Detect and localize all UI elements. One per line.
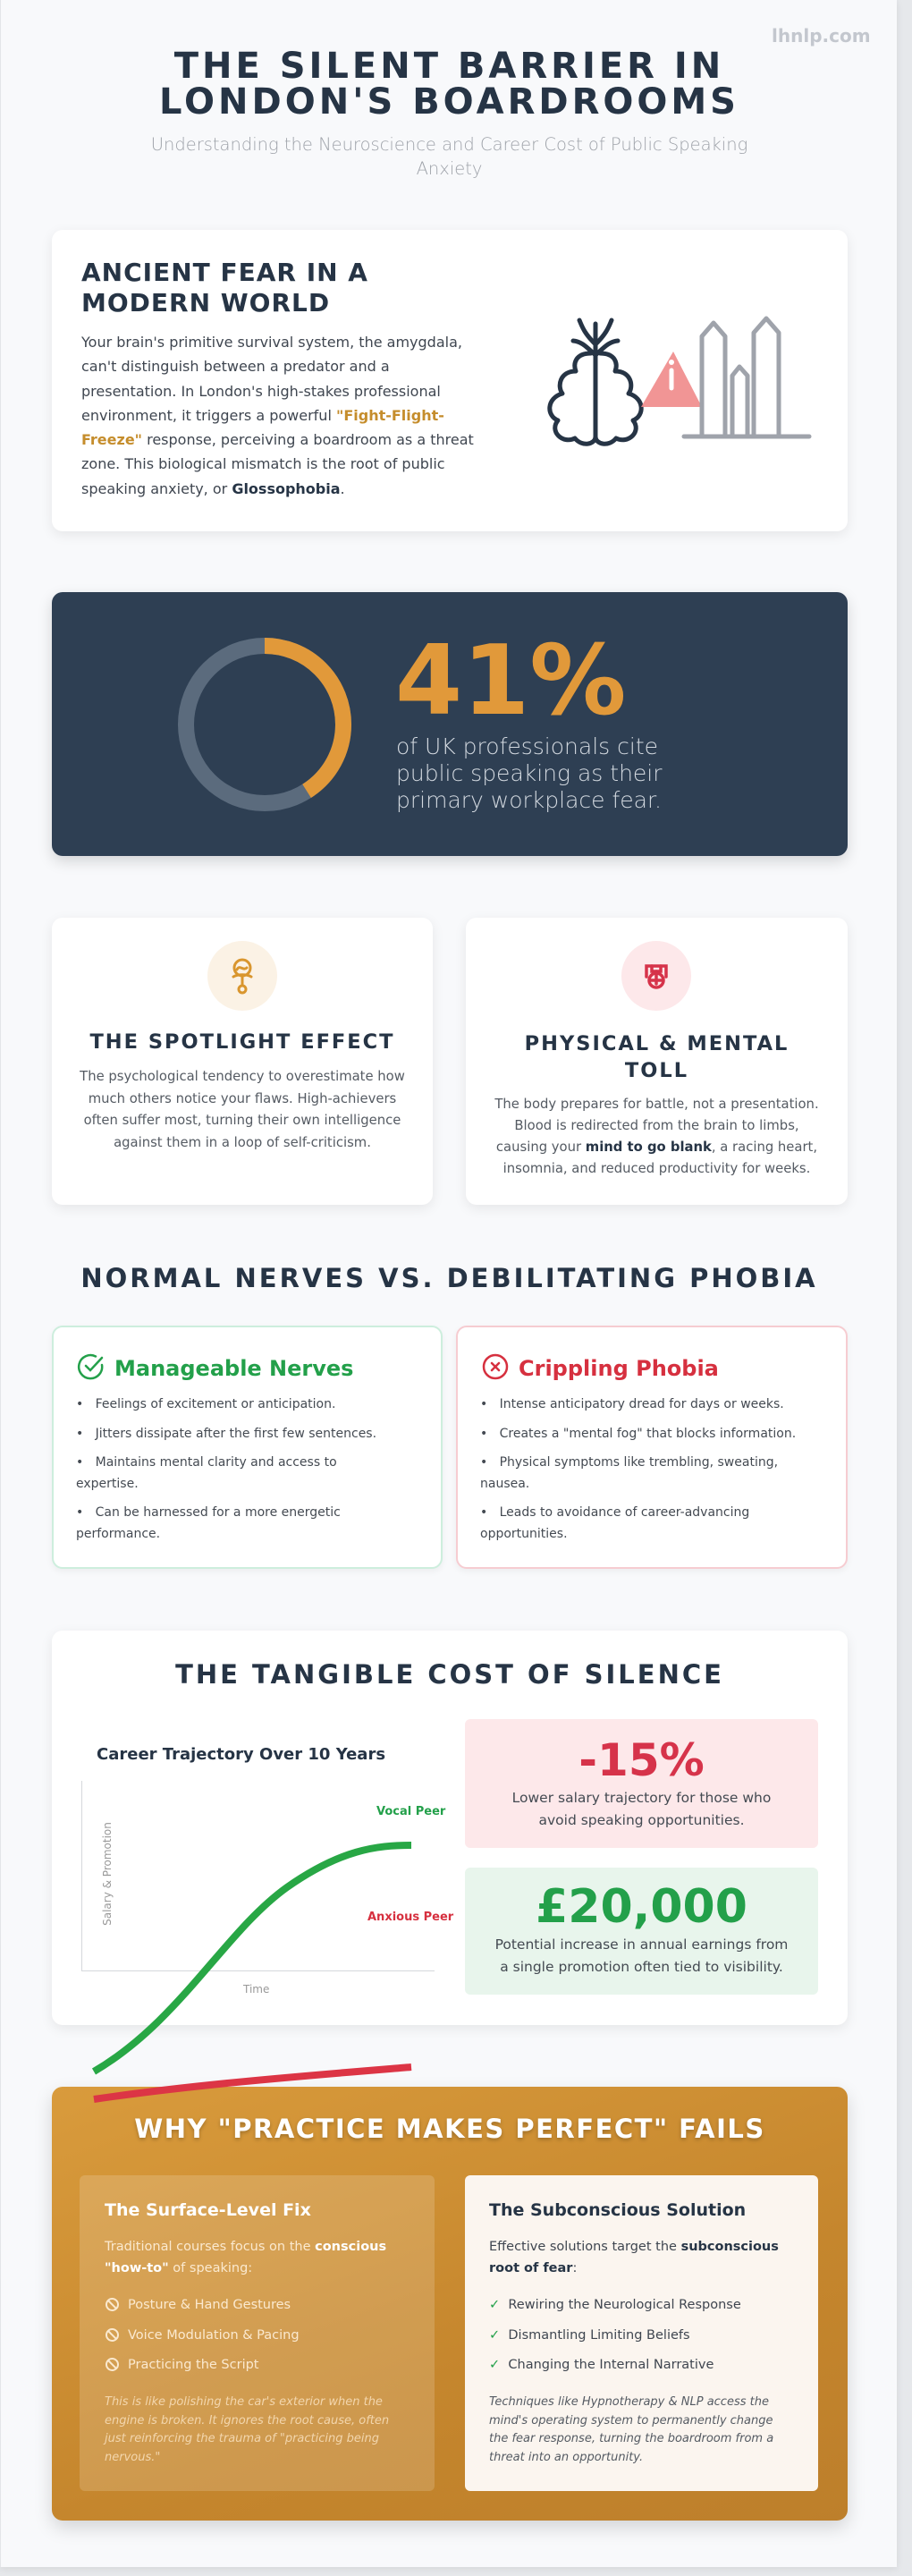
title: LONDON'S BOARDROOMS xyxy=(159,81,739,123)
heading: physical toll: PHYSICAL & MENTAL xyxy=(525,1032,789,1055)
chart title: Career Trajectory Over 10 Years xyxy=(97,1745,385,1764)
list: subconscious: ✓ Dismantling Limiting Beliefs xyxy=(489,2327,690,2342)
list: crippling phobia: • Intense anticipatory dread for days or weeks. xyxy=(480,1397,784,1411)
panel: manageable nerves xyxy=(52,1326,443,1569)
stat: -15%: -15% xyxy=(578,1734,705,1786)
stat: £20,000: £20,000 xyxy=(536,1880,747,1934)
stat description xyxy=(396,733,663,813)
list: manageable nerves: • Maintains mental clarity and access to xyxy=(76,1455,337,1470)
list: crippling phobia: opportunities. xyxy=(480,1526,568,1540)
body text: ancient fear: speaking anxiety, or Glossophobia. xyxy=(81,480,345,497)
list: manageable nerves: performance. xyxy=(76,1526,160,1540)
heading: subconscious: The Subconscious Solution xyxy=(489,2200,746,2220)
list: crippling phobia: • Leads to avoidance of career-advancing xyxy=(480,1505,749,1520)
intro: subconscious: Effective solutions target the subconscious root of fear: xyxy=(489,2240,779,2275)
heading: ancient fear xyxy=(81,258,368,318)
stat description: of UK professionals cite xyxy=(396,733,658,759)
list: subconscious: ✓ Changing the Internal Narrative xyxy=(489,2358,714,2372)
note: surface fix: This is like polishing the car's exterior when the xyxy=(105,2395,383,2409)
title xyxy=(159,46,739,123)
text: spotlight: much others notice your flaws. High-achievers xyxy=(89,1091,396,1106)
brand: lhnlp.com xyxy=(772,25,871,47)
body text: ancient fear: environment, it triggers a powerful "Fight-Flight- xyxy=(81,407,444,424)
panel: spotlight effect xyxy=(52,918,433,1205)
panel: practice fails xyxy=(52,2087,848,2521)
panel: physical & mental toll xyxy=(466,918,848,1205)
icon: body toll xyxy=(621,941,691,1011)
heading: nerves vs phobia: NORMAL NERVES VS. DEBILITATING PHOBIA xyxy=(80,1263,818,1293)
body text: ancient fear: presentation. In London's high-stakes professional xyxy=(81,383,441,400)
list: crippling phobia: • Creates a "mental fog" that blocks information. xyxy=(480,1426,796,1440)
text: physical toll: Blood is redirected from the brain to limbs, xyxy=(514,1118,799,1133)
label: anxious peer: Anxious Peer xyxy=(367,1911,453,1924)
note: subconscious xyxy=(489,2395,773,2463)
note: subconscious: threat into an opportunity. xyxy=(489,2451,643,2463)
stat: £20,000 xyxy=(465,1868,818,1995)
text: spotlight: against them in a loop of self-criticism. xyxy=(114,1134,371,1150)
text: physical toll: causing your mind to go blank, a racing heart, xyxy=(496,1140,817,1155)
heading: practice fails: WHY "PRACTICE MAKES PERFECT" FAILS xyxy=(134,2114,765,2144)
list: crippling phobia xyxy=(480,1397,796,1540)
chart lines: vocal vs anxious peer xyxy=(92,1842,411,2103)
panel: ancient fear xyxy=(52,230,848,531)
heading: physical toll: TOLL xyxy=(625,1059,688,1082)
stat description: primary workplace fear. xyxy=(396,787,662,813)
stat description: public speaking as their xyxy=(396,760,663,786)
heading: ancient fear: MODERN WORLD xyxy=(81,288,330,318)
list: surface fix: Practicing the Script xyxy=(128,2358,259,2372)
list: manageable nerves: • Feelings of excitement or anticipation. xyxy=(76,1397,335,1411)
list: surface fix: Voice Modulation & Pacing xyxy=(128,2327,300,2342)
list: manageable nerves: • Can be harnessed for a more energetic xyxy=(76,1505,341,1520)
body text: ancient fear: zone. This biological mismatch is the root of public xyxy=(81,455,445,472)
axis label: time: Time xyxy=(243,1983,269,1996)
title: THE SILENT BARRIER IN xyxy=(174,46,724,87)
body text: ancient fear: can't distinguish between a predator and a xyxy=(81,358,390,375)
stat: -15% xyxy=(465,1719,818,1848)
stat: £20,000: Potential increase in annual earnings from xyxy=(495,1936,788,1953)
list: manageable nerves: • Jitters dissipate after the first few sentences. xyxy=(76,1426,376,1440)
stat: -15%: Lower salary trajectory for those who xyxy=(512,1790,771,1806)
heading: physical toll xyxy=(525,1032,789,1082)
text: spotlight: The psychological tendency to overestimate how xyxy=(80,1069,405,1084)
note: surface fix: engine is broken. It ignores the root cause, often xyxy=(105,2413,389,2428)
heading: crippling phobia: Crippling Phobia xyxy=(519,1356,719,1381)
list: surface fix xyxy=(106,2298,300,2372)
list: crippling phobia: • Physical symptoms like trembling, sweating, xyxy=(480,1455,778,1470)
heading: manageable nerves: Manageable Nerves xyxy=(114,1356,353,1381)
label: vocal peer: Vocal Peer xyxy=(376,1805,445,1818)
list: manageable nerves xyxy=(76,1397,376,1540)
box: surface-level fix xyxy=(80,2175,435,2491)
text: physical toll xyxy=(494,1097,819,1176)
stat: £20,000: a single promotion often tied to visibility. xyxy=(500,1959,783,1975)
icon: brain, warning and city xyxy=(547,317,812,446)
subtitle: Understanding the Neuroscience and Career Cost of Public Speaking Anxiety xyxy=(151,134,747,179)
list: subconscious xyxy=(489,2298,741,2372)
intro: surface fix: Traditional courses focus on the conscious "how-to" of speaking: xyxy=(105,2240,386,2275)
heading: surface fix: The Surface-Level Fix xyxy=(105,2200,311,2220)
note: surface fix: nervous." xyxy=(105,2451,160,2463)
list: crippling phobia: nausea. xyxy=(480,1476,529,1490)
text: spotlight: often suffer most, turning their own intelligence xyxy=(84,1113,401,1128)
note: subconscious: the fear response, turning the boardroom from a xyxy=(489,2432,773,2445)
panel: crippling phobia xyxy=(456,1326,848,1569)
note: surface fix xyxy=(104,2395,389,2463)
text: physical toll: insomnia, and reduced productivity for weeks. xyxy=(503,1161,810,1176)
body text: ancient fear: Your brain's primitive survival system, the amygdala, xyxy=(81,334,462,351)
body text: ancient fear: Freeze" response, perceiving a boardroom as a threat xyxy=(81,431,474,448)
heading: ancient fear: ANCIENT FEAR IN A xyxy=(81,258,368,287)
note: subconscious: Techniques like Hypnotherapy & NLP access the xyxy=(489,2395,769,2409)
box: subconscious solution xyxy=(465,2175,818,2491)
body text: ancient fear xyxy=(81,334,474,497)
panel: 41% stat xyxy=(52,592,848,856)
axis label: salary: Salary & Promotion xyxy=(101,1822,114,1926)
stat: -15%: avoid speaking opportunities. xyxy=(538,1812,745,1828)
heading: tangible cost: THE TANGIBLE COST OF SILENCE xyxy=(175,1659,724,1690)
icon: spotlight xyxy=(207,941,277,1011)
donut chart 41% xyxy=(178,638,351,811)
note: subconscious: mind's operating system to permanently change xyxy=(489,2413,773,2428)
text: spotlight xyxy=(80,1069,405,1150)
list: surface fix: Posture & Hand Gestures xyxy=(128,2298,291,2312)
chart axes xyxy=(81,1781,435,1971)
note: surface fix: just reinforcing the trauma of "practicing being xyxy=(105,2432,379,2445)
list: subconscious: ✓ Rewiring the Neurological Response xyxy=(489,2298,741,2312)
panel: tangible cost xyxy=(52,1631,848,2025)
list: manageable nerves: expertise. xyxy=(76,1476,139,1490)
text: physical toll: The body prepares for battle, not a presentation. xyxy=(494,1097,819,1112)
stat number: 41% xyxy=(395,625,627,737)
heading: spotlight: THE SPOTLIGHT EFFECT xyxy=(89,1030,395,1054)
